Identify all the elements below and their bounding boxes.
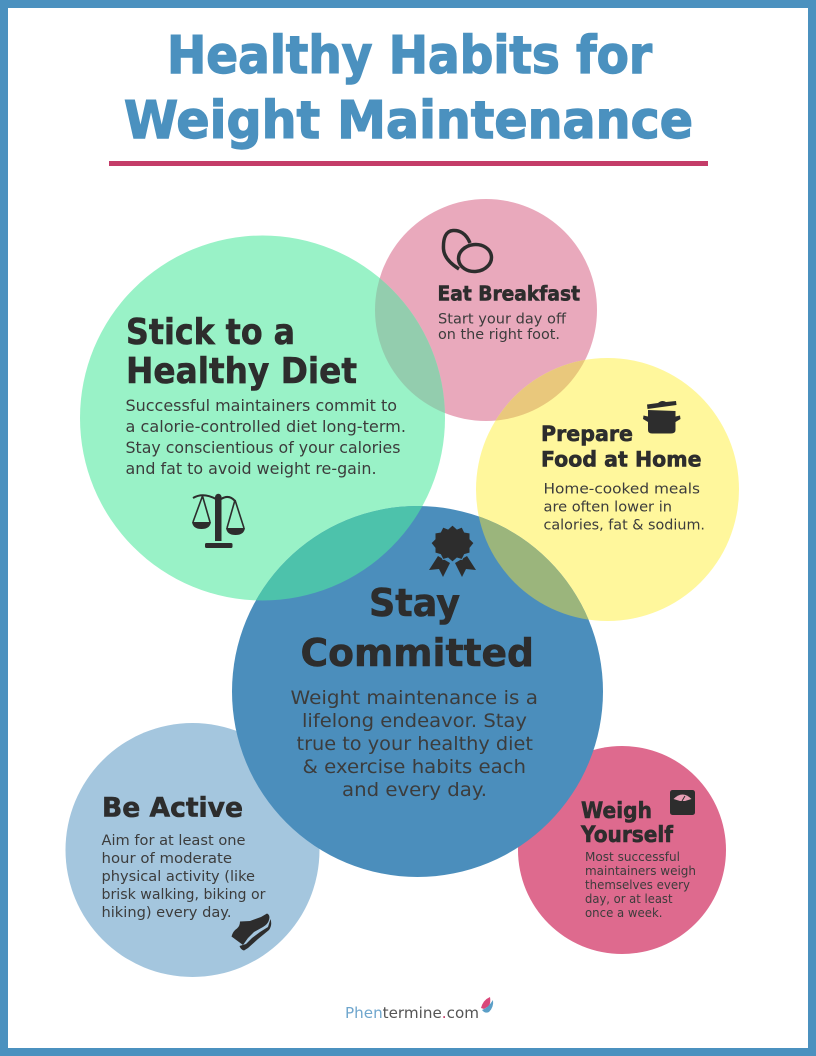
logo: phentermine.com (345, 997, 493, 1022)
panel: stick to a healthy diet (126, 312, 406, 548)
panel: weigh yourself (580, 790, 696, 920)
overlap: breakfast and food (496, 360, 585, 420)
text: active description: physical activity (like (102, 869, 255, 885)
title: Weight Maintenance (124, 91, 693, 151)
text: active description: Aim for at least one (102, 833, 246, 849)
text: committed description (290, 687, 538, 801)
heading: prepare food at home: Food at Home (541, 448, 702, 472)
logo: phentermine.com: Phentermine.com (345, 1004, 479, 1022)
text: diet description (126, 396, 406, 478)
heading: stay committed: Committed (300, 631, 534, 675)
text: weigh description: day, or at least (585, 892, 673, 906)
text: weigh description: maintainers weigh (585, 864, 696, 878)
heading: be active: Be Active (102, 792, 243, 824)
icon: logo feather (481, 997, 493, 1013)
icon: running shoe (232, 914, 271, 950)
overlap: committed and food (478, 516, 588, 620)
text: diet description: a calorie-controlled diet long-term. (126, 417, 406, 436)
icon: eggs (443, 230, 493, 273)
heading: stick to a healthy diet: Stick to a (126, 312, 295, 353)
text: diet description: and fat to avoid weight re-gain. (126, 459, 376, 478)
text: breakfast description: on the right foot. (438, 327, 560, 343)
heading: stick to a healthy diet (126, 312, 357, 392)
heading: weigh yourself: Yourself (580, 822, 673, 848)
heading: stick to a healthy diet: Healthy Diet (126, 351, 357, 392)
overlap: committed and diet (256, 506, 422, 600)
heading: stay committed (300, 581, 534, 675)
circle: eat breakfast background (375, 199, 597, 421)
panel: be active (102, 792, 271, 950)
heading: prepare food at home: Prepare (541, 422, 633, 446)
heading: eat breakfast: Eat Breakfast (438, 282, 580, 306)
title underline (109, 161, 708, 166)
text: active description: hour of moderate (102, 851, 232, 867)
text: committed description: lifelong endeavor. Stay (302, 710, 527, 732)
heading: weigh yourself: Weigh (581, 798, 652, 824)
panel: eat breakfast (438, 230, 580, 343)
overlap: breakfast and diet (375, 278, 445, 413)
heading: stay committed: Stay (369, 581, 460, 625)
text: committed description: & exercise habits each (302, 756, 526, 778)
circle: prepare food background (476, 358, 739, 621)
icon: balance scale (192, 494, 245, 548)
text: food description (544, 482, 705, 534)
text: food description: are often lower in (544, 500, 672, 516)
text: diet description: Successful maintainers commit to (126, 396, 397, 415)
heading: prepare food at home (541, 422, 702, 472)
icon: cooking pot (643, 401, 680, 434)
text: weigh description: once a week. (585, 906, 662, 920)
circle: stick to a healthy diet background (80, 236, 445, 600)
circle: be active background (66, 723, 320, 977)
text: active description (102, 833, 266, 921)
panel: stay committed (290, 525, 538, 801)
text: committed description: and every day. (342, 779, 487, 801)
text: weigh description: Most successful (585, 850, 680, 864)
icon: award ribbon (429, 525, 476, 577)
circle: weigh yourself background (518, 746, 726, 954)
text: breakfast description (438, 312, 566, 343)
panel: prepare food at home (541, 401, 705, 534)
text: active description: brisk walking, biking or (102, 887, 266, 903)
circle: stay committed background (232, 506, 603, 877)
text: food description: Home-cooked meals (544, 482, 700, 498)
icon: bathroom scale (670, 790, 695, 815)
text: diet description: Stay conscientious of your calories (126, 438, 400, 457)
text: committed description: true to your healthy diet (296, 733, 533, 755)
text: breakfast description: Start your day off (438, 312, 566, 328)
text: weigh description: themselves every (585, 878, 690, 892)
heading: weigh yourself (580, 798, 673, 848)
text: active description: hiking) every day. (102, 905, 232, 921)
text: weigh description (585, 850, 696, 920)
title: Healthy Habits for (167, 26, 652, 86)
text: committed description: Weight maintenance is a (290, 687, 538, 709)
title (124, 26, 693, 151)
text: food description: calories, fat & sodium. (544, 518, 705, 534)
